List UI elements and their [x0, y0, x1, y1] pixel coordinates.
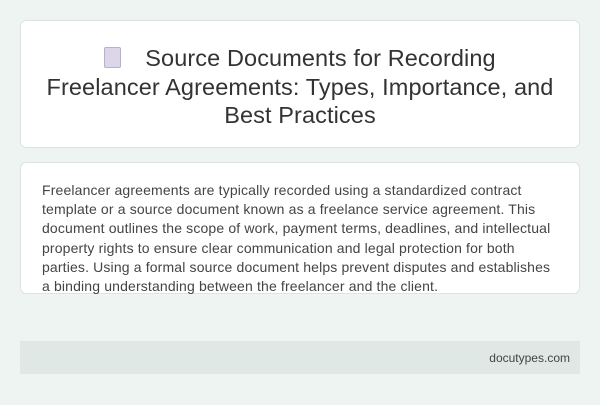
title: Source Documents for Recording — [145, 45, 496, 71]
text block — [42, 182, 550, 294]
title — [46, 45, 553, 128]
title: Best Practices — [224, 102, 376, 128]
footer — [20, 341, 580, 374]
text block: property rights to ensure clear communication and legal protection for both — [42, 240, 515, 256]
text block: parties. Using a formal source document helps prevent disputes and establishes — [42, 259, 550, 275]
panel: title — [20, 20, 580, 148]
panel: description — [20, 162, 580, 294]
text block: document outlines the scope of work, payment terms, deadlines, and intellectual — [42, 220, 550, 236]
text block: template or a source document known as a freelance service agreement. This — [42, 201, 535, 217]
text block: a binding understanding between the freelancer and the client. — [42, 278, 438, 294]
text block: Freelancer agreements are typically recorded using a standardized contract — [42, 182, 522, 198]
icon: document — [104, 47, 121, 68]
footer text: docutypes.com — [489, 351, 570, 365]
title: Freelancer Agreements: Types, Importance, and — [46, 74, 553, 100]
